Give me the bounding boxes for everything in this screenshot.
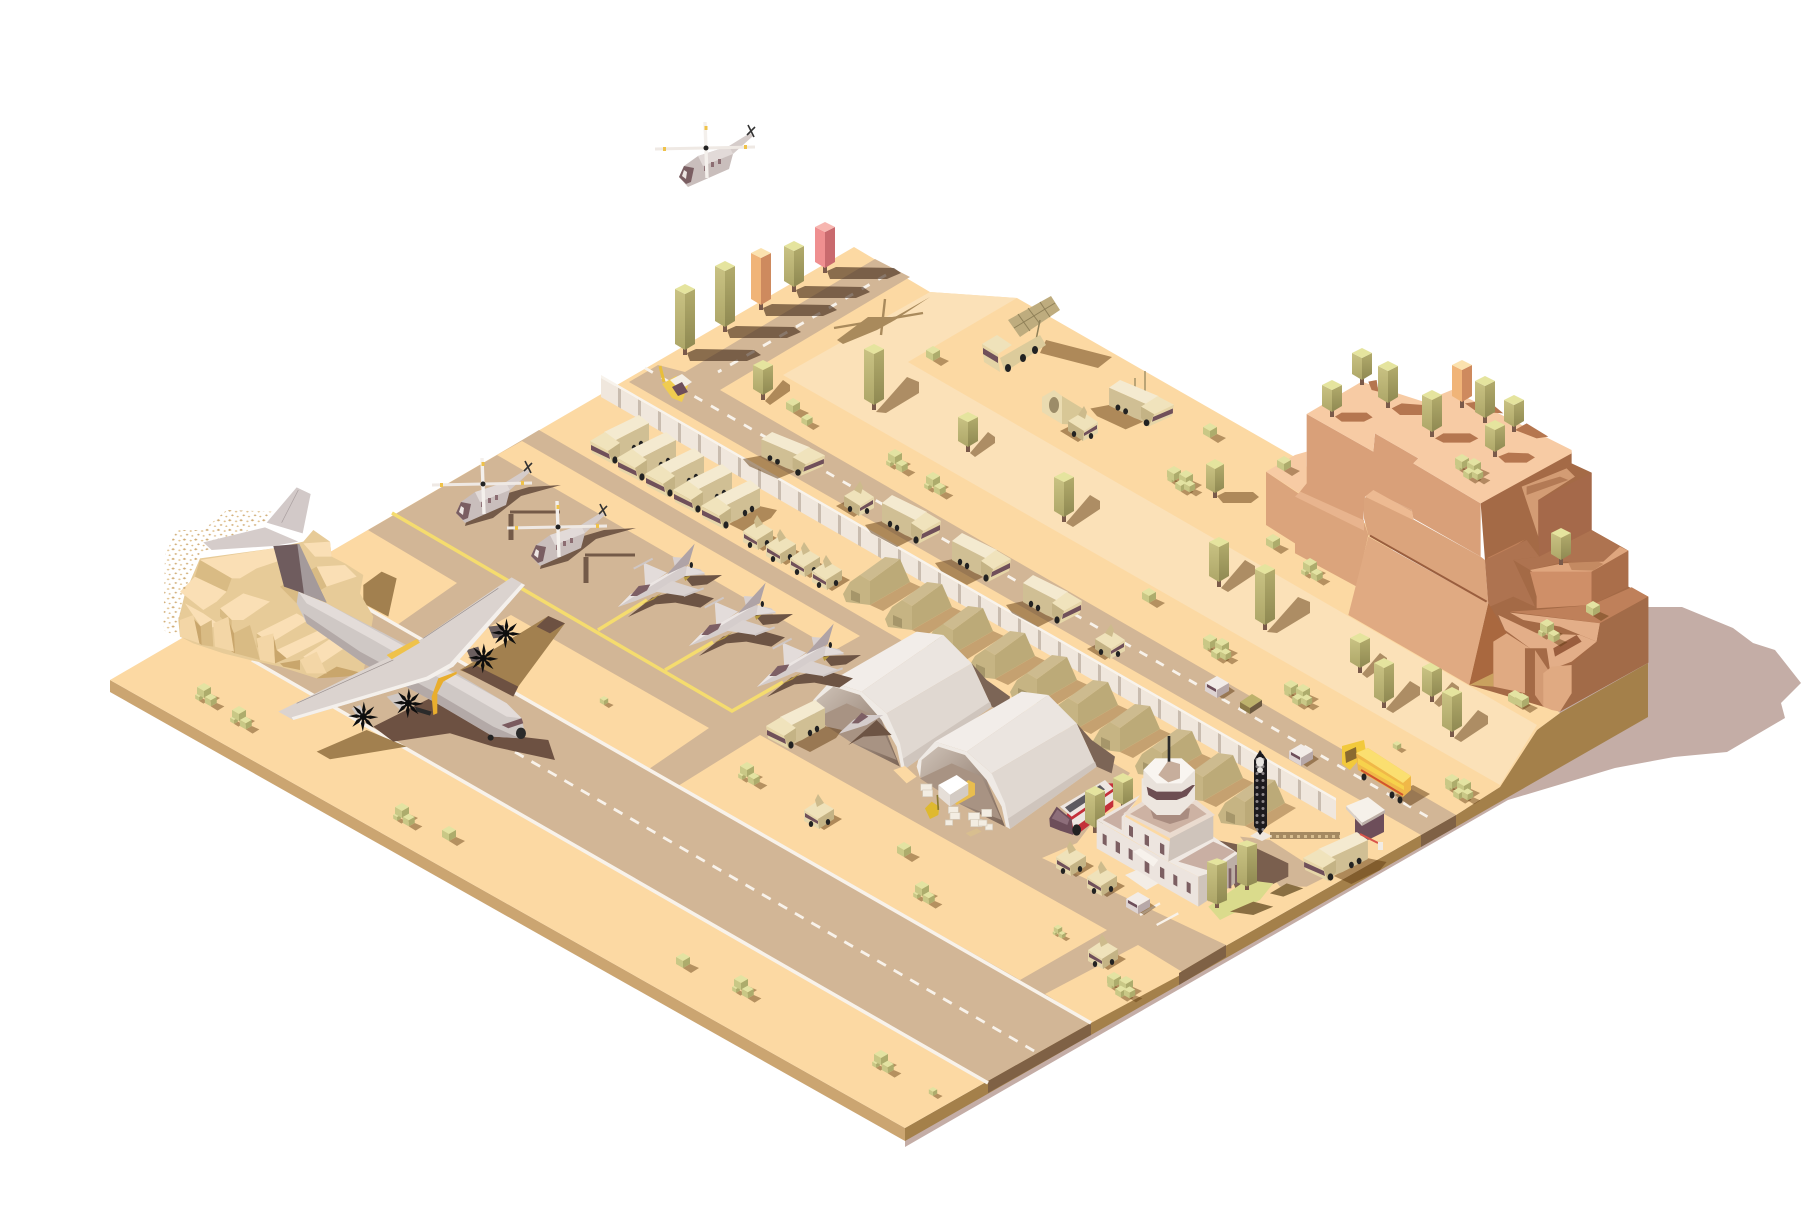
lattice mast and its ladder shadow xyxy=(1250,750,1340,841)
aircraft fin shadow xyxy=(363,572,397,617)
concrete barrier wall xyxy=(601,375,1336,820)
taupe spur behind the tower xyxy=(1240,837,1327,887)
lower wing end wall xyxy=(1198,872,1208,907)
rubble terraces xyxy=(180,542,357,667)
truck at the gate xyxy=(1303,832,1387,884)
dark edge notches where paved surfaces meet the rim xyxy=(988,815,1456,1093)
vehicles on the road xyxy=(743,432,1319,767)
control tower complex xyxy=(1049,736,1327,925)
rock: lower left block face xyxy=(1266,472,1368,587)
shadow of the platform and mesa xyxy=(905,607,1801,1147)
antenna xyxy=(1165,736,1173,762)
road centre dashes xyxy=(645,275,1435,821)
sand block D xyxy=(1045,945,1184,1023)
aircraft right wing shadow xyxy=(460,616,565,693)
radar truck with antenna xyxy=(1090,371,1174,429)
lower wing left wall xyxy=(1097,820,1198,907)
helicopter 1 parked xyxy=(432,458,561,540)
rock: upper-right notch xyxy=(1522,468,1575,537)
right wing colonnade xyxy=(1208,853,1240,902)
armoured vehicle near the rim xyxy=(1088,934,1126,970)
runway threshold rubble and transport aircraft xyxy=(163,487,565,760)
terrace with balustrade xyxy=(1123,797,1215,838)
entrance canopy and steps xyxy=(1133,848,1158,867)
platform: sand top surface xyxy=(110,247,1560,1128)
humvee on the sand xyxy=(804,794,842,830)
apron, taxiways and runway surface xyxy=(252,430,1226,1081)
sand block C xyxy=(678,735,1107,980)
window ring xyxy=(1147,785,1195,800)
aircraft fuselage yellow band xyxy=(432,672,457,715)
tents row xyxy=(843,557,1296,832)
radar dish vehicle xyxy=(1042,390,1098,442)
helicopter shadow on the plateau xyxy=(834,297,930,344)
aircraft left wing shadow xyxy=(317,730,407,759)
aircraft engines xyxy=(352,625,507,718)
front trees xyxy=(1207,840,1257,908)
parked vehicles by the tower xyxy=(1056,841,1156,915)
yellow utility truck xyxy=(660,366,692,402)
hangar 1 xyxy=(812,632,1010,769)
rock: middle band xyxy=(1364,492,1488,603)
rear trees xyxy=(1085,773,1133,833)
guard house xyxy=(1346,797,1385,840)
jet inside hangar xyxy=(838,713,892,745)
second storey right wall xyxy=(1168,815,1213,862)
service road xyxy=(629,259,1456,835)
tower upper disc xyxy=(1143,758,1195,792)
rock: crack line xyxy=(1370,536,1487,602)
yellow fuel tanker xyxy=(1342,740,1430,806)
sand block A xyxy=(300,530,457,625)
rock: dark mass to the right xyxy=(1469,452,1648,712)
yellow taxi lines xyxy=(392,513,783,711)
second storey left wall xyxy=(1123,817,1170,862)
aircraft rear fuselage xyxy=(273,544,327,603)
mesa rock formation xyxy=(1266,380,1648,712)
truck by the hangar xyxy=(766,700,842,752)
fire truck xyxy=(1049,780,1113,836)
rock: mesa top surface xyxy=(1307,382,1572,503)
low roof at left xyxy=(1097,795,1140,835)
lighter sand band on the plateau xyxy=(783,292,1537,785)
hangar 2 xyxy=(917,692,1115,829)
helicopter 2 parked xyxy=(507,501,636,583)
aircraft body shadow xyxy=(373,693,555,760)
tower lower disc xyxy=(1142,775,1195,815)
rock: tree shadows on top surface xyxy=(1335,380,1548,463)
rock: large lower face xyxy=(1348,537,1488,685)
parked trucks row xyxy=(590,415,777,532)
runway markings xyxy=(252,607,1091,1083)
mesa top trees and bushes xyxy=(1277,348,1609,710)
rock: lower terrace xyxy=(1510,587,1648,623)
aircraft main wing xyxy=(278,577,525,720)
tower base xyxy=(1150,808,1190,824)
platform: right side wall xyxy=(905,663,1648,1141)
building and tree shadows xyxy=(1217,840,1288,900)
scattered bushes xyxy=(195,346,1538,1099)
aircraft wing-root yellow stripe xyxy=(387,639,420,659)
mobile missile launcher xyxy=(982,296,1112,372)
rock: mid terrace xyxy=(1513,530,1628,570)
fighter jets xyxy=(618,544,861,697)
plateau trees xyxy=(753,344,1488,742)
platform: left side wall xyxy=(110,680,905,1141)
roof unit xyxy=(1158,761,1180,782)
rock: upper block left face xyxy=(1300,414,1481,557)
rock: lower left shelf top xyxy=(1266,452,1307,493)
aircraft fuselage xyxy=(297,592,525,738)
sand block B xyxy=(444,615,709,769)
aircraft tailplane xyxy=(203,527,298,550)
aircraft propellers xyxy=(348,618,521,732)
parking lines xyxy=(1140,903,1178,925)
row of tall trees with shadows xyxy=(675,222,901,361)
lower windows xyxy=(1103,833,1191,894)
rubble shaded faces xyxy=(195,560,327,660)
rubble silhouette xyxy=(178,530,373,678)
rubble dust particles xyxy=(163,510,272,637)
parked humvees row xyxy=(743,515,850,591)
aircraft tail fin xyxy=(267,487,311,533)
right wing roof xyxy=(1168,837,1238,877)
pallets, forklift and van at hangar 2 xyxy=(893,766,993,837)
sand strip beside the apron xyxy=(497,441,860,650)
helicopter in flight xyxy=(655,122,755,187)
